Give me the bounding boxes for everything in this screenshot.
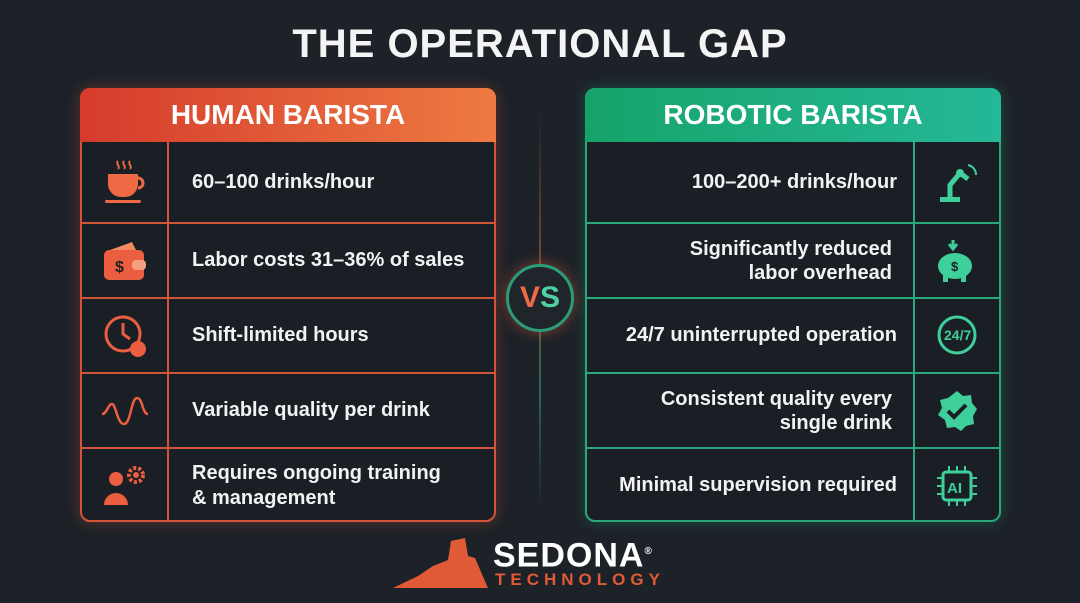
icon column divider	[167, 142, 169, 522]
row: supervision	[587, 447, 999, 522]
row: labor costs: $	[114, 258, 124, 276]
row: throughput	[692, 164, 977, 202]
row: supervision: Minimal supervision required	[619, 474, 897, 496]
row: labor costs: Labor costs 31–36% of sales	[192, 249, 464, 271]
heading: robotic barista	[585, 88, 1001, 142]
row: shift-limited: Shift-limited hours	[192, 324, 369, 346]
VS badge: VS	[520, 281, 560, 314]
row: throughput: 100–200+ drinks/hour	[692, 170, 897, 192]
row: consistent quality: single drink	[780, 412, 892, 434]
row: training	[82, 447, 494, 522]
row: labor overhead: $	[951, 258, 959, 274]
row: labor overhead	[587, 222, 999, 297]
title: THE OPERATIONAL GAP	[292, 22, 788, 66]
row: drinks per hour: 60–100 drinks/hour	[192, 170, 374, 192]
panel: robotic barista	[585, 88, 1001, 522]
VS badge	[506, 264, 574, 332]
row: training: & management	[192, 486, 335, 508]
row: variable quality: Variable quality per drink	[192, 399, 430, 421]
row: drinks per hour	[105, 160, 374, 203]
heading: human barista	[80, 88, 496, 142]
row: consistent quality	[587, 372, 999, 447]
logo: Sedona Technology: TECHNOLOGY	[495, 570, 665, 589]
row: shift-limited	[82, 297, 494, 372]
icon: rock mark	[393, 538, 488, 588]
row: labor costs	[82, 222, 494, 297]
logo text: SEDONA®	[493, 536, 653, 574]
row: supervision: AI	[947, 480, 962, 496]
row: consistent quality: Consistent quality every	[661, 388, 892, 410]
heading: robotic barista: ROBOTIC BARISTA	[663, 99, 923, 130]
row: 24/7	[587, 297, 999, 372]
logo: Sedona Technology	[393, 536, 665, 589]
heading: human barista: HUMAN BARISTA	[171, 99, 405, 130]
row: 24/7: 24/7	[944, 326, 971, 342]
center divider line	[539, 110, 541, 510]
row: labor overhead: labor overhead	[749, 262, 892, 284]
row: 24/7: 24/7 uninterrupted operation	[626, 324, 897, 346]
panel: human barista	[80, 88, 496, 522]
row: variable quality	[82, 372, 494, 447]
row: training: Requires ongoing training	[192, 462, 441, 484]
row: labor overhead: Significantly reduced	[690, 238, 892, 260]
icon column divider	[913, 142, 915, 522]
